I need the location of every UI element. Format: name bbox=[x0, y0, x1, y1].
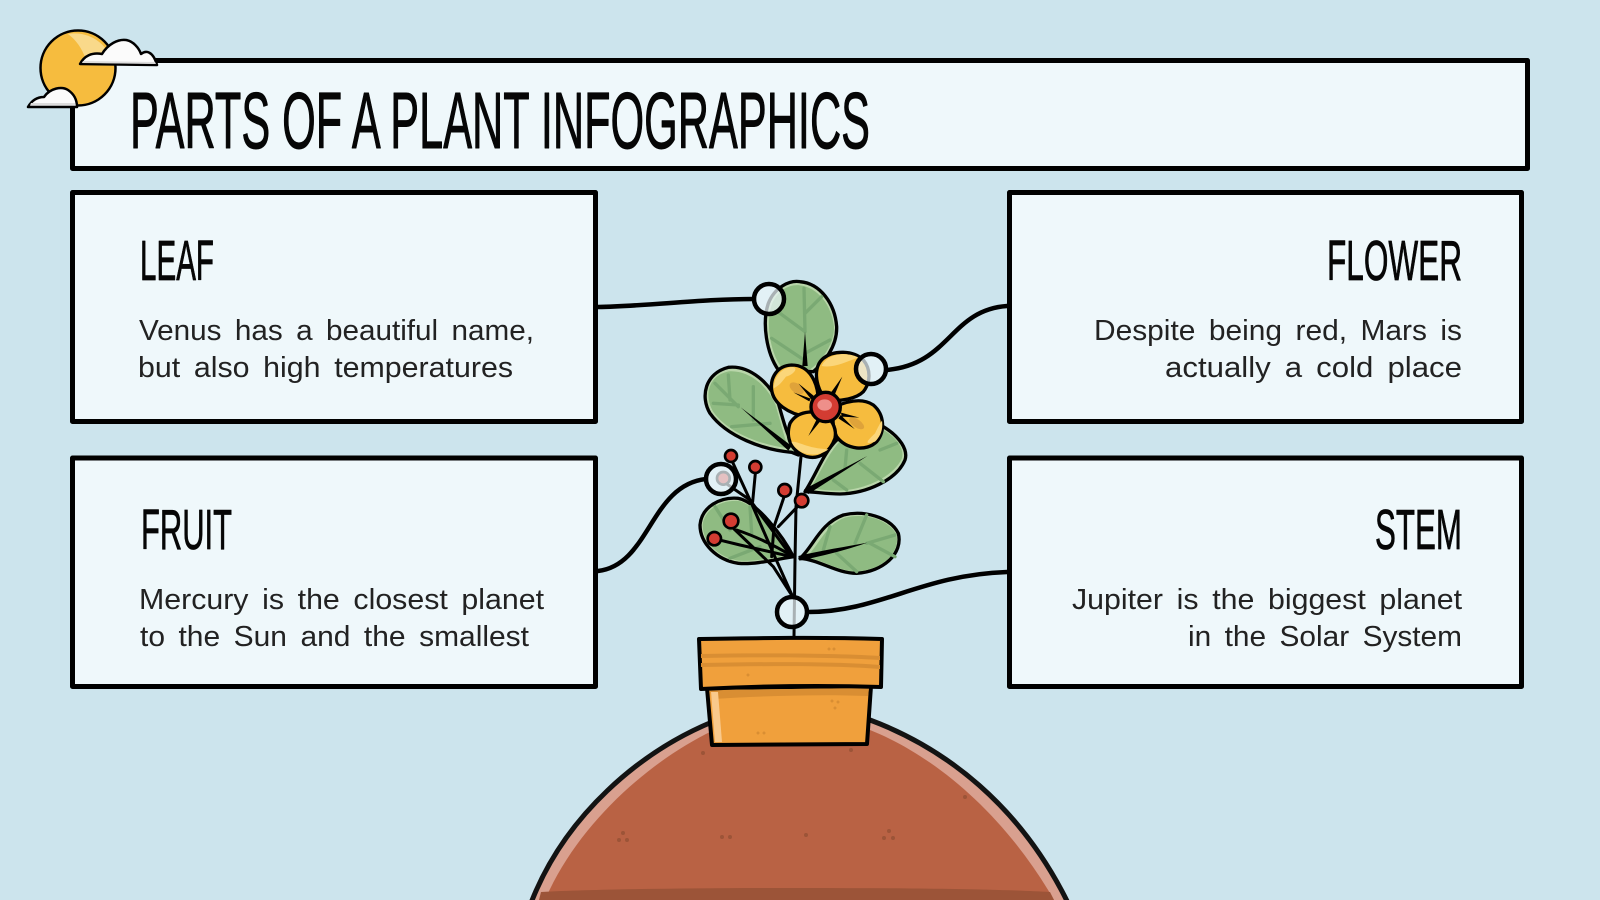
midrib bbox=[737, 530, 793, 557]
connector: fruit bbox=[598, 479, 706, 571]
marker: flower bbox=[856, 354, 886, 384]
main stem bbox=[794, 457, 801, 637]
heading: fruit: FRUIT bbox=[141, 498, 232, 562]
text: flower description: Despite being red, Mars is bbox=[1094, 315, 1462, 347]
midrib bbox=[804, 456, 867, 494]
connector: stem bbox=[808, 572, 1007, 612]
panel: stem bbox=[1010, 458, 1522, 686]
flower bbox=[771, 352, 883, 457]
heading: leaf: LEAF bbox=[140, 229, 214, 293]
lower right leaf bbox=[798, 513, 899, 573]
top leaf bbox=[765, 281, 837, 372]
panel: fruit bbox=[72, 458, 596, 686]
text: leaf description: but also high temperatures bbox=[138, 352, 513, 384]
connector: flower bbox=[886, 306, 1007, 370]
text: leaf description: Venus has a beautiful name, bbox=[139, 315, 534, 347]
marker: stem bbox=[777, 597, 807, 627]
petals bbox=[771, 352, 883, 457]
text: fruit description: to the Sun and the smallest bbox=[140, 621, 529, 653]
lower left leaf bbox=[700, 498, 793, 564]
midrib bbox=[802, 332, 808, 366]
heading: stem: STEM bbox=[1375, 498, 1462, 562]
title: PARTS OF A PLANT INFOGRAPHICS bbox=[130, 76, 870, 165]
icon: soil hill bbox=[531, 720, 1068, 900]
midrib bbox=[741, 407, 792, 451]
panel: flower bbox=[1010, 192, 1522, 422]
panel: leaf bbox=[72, 192, 596, 422]
text: fruit description: Mercury is the closest planet bbox=[139, 584, 544, 616]
connector: leaf bbox=[598, 299, 754, 307]
flower centre bbox=[811, 392, 840, 422]
text: flower description: actually a cold place bbox=[1165, 352, 1462, 384]
text: stem description: in the Solar System bbox=[1188, 621, 1462, 653]
left leaf bbox=[705, 367, 798, 455]
heading: flower: FLOWER bbox=[1327, 229, 1462, 293]
title panel bbox=[72, 60, 1528, 168]
marker: fruit bbox=[706, 464, 736, 494]
berries and twigs bbox=[708, 450, 808, 597]
icon: flower pot bbox=[699, 638, 882, 745]
right leaf bbox=[804, 427, 906, 494]
text: stem description: Jupiter is the biggest planet bbox=[1072, 584, 1462, 616]
icon: sun with clouds bbox=[28, 30, 157, 107]
midrib bbox=[798, 543, 867, 561]
marker: leaf bbox=[754, 284, 784, 314]
icon: plant bbox=[700, 281, 906, 637]
